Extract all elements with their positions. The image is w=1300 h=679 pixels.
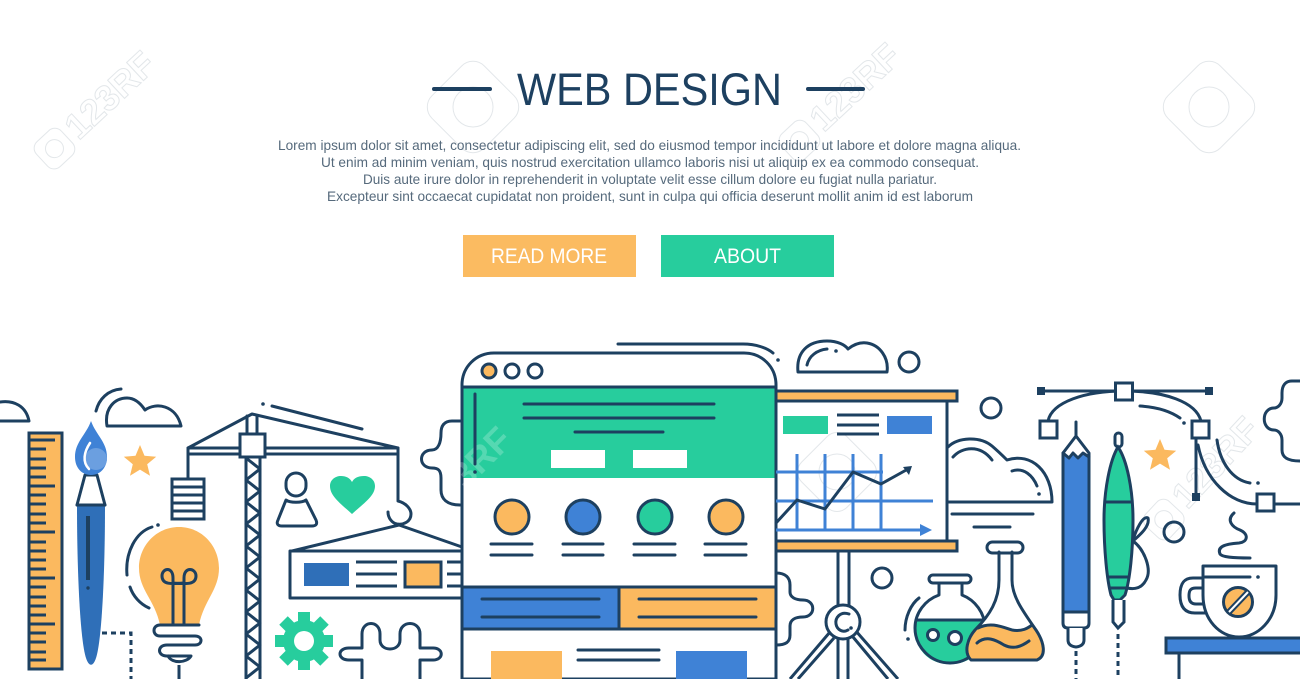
puzzle piece right of browser bbox=[776, 573, 813, 645]
button: read more bbox=[463, 235, 636, 277]
browser window bbox=[443, 353, 776, 679]
icon: round flask bbox=[905, 575, 985, 664]
icon: coffee cup with steam bbox=[1180, 513, 1276, 637]
button: read more: READ MORE bbox=[491, 245, 607, 268]
button: about: ABOUT bbox=[714, 245, 781, 268]
icon: erlenmeyer flask bbox=[967, 542, 1043, 660]
watermarks: 123RF bbox=[1163, 409, 1267, 516]
icon: star right bbox=[1144, 439, 1176, 470]
bezier curve tool bbox=[1037, 383, 1300, 511]
browser window: 3RF bbox=[443, 419, 520, 496]
icon: star left bbox=[124, 445, 156, 476]
intro paragraph bbox=[278, 137, 1021, 204]
puzzle piece bottom bbox=[340, 624, 441, 679]
table bbox=[1166, 638, 1300, 679]
watermarks: 123RF bbox=[801, 35, 908, 139]
decorative circles bbox=[872, 352, 1184, 588]
cloud: far left bbox=[0, 402, 29, 421]
wireframe panel under crane bbox=[290, 525, 462, 598]
cloud: top centre bbox=[798, 341, 887, 372]
icon: ruler bbox=[29, 433, 62, 669]
dashed connector bbox=[102, 633, 131, 679]
icon: pen tool bbox=[1104, 433, 1148, 679]
icon: paint brush bbox=[75, 421, 107, 665]
icon: construction crane bbox=[172, 402, 411, 679]
watermarks bbox=[27, 35, 1267, 545]
intro paragraph: Duis aute irure dolor in reprehenderit in voluptate velit esse cillum dolore eu fugiat nulla pariatur. bbox=[363, 171, 937, 187]
watermarks: 123RF bbox=[56, 43, 163, 147]
cloud: above brush bbox=[96, 389, 181, 426]
cloud: right of board bbox=[948, 439, 1052, 527]
icon: user bbox=[277, 473, 317, 526]
intro paragraph: Lorem ipsum dolor sit amet, consectetur adipiscing elit, sed do eiusmod tempor incididunt ut labore et dolore magna aliqua. bbox=[278, 137, 1021, 153]
icon: pencil bbox=[1063, 422, 1089, 679]
line above browser bbox=[618, 344, 780, 362]
icon: gear bbox=[275, 612, 333, 670]
intro paragraph: Excepteur sint occaecat cupidatat non proident, sunt in culpa qui officia deserunt mollit anim id est laborum bbox=[327, 188, 973, 204]
presentation board with chart bbox=[776, 391, 957, 551]
icon: heart bbox=[330, 476, 375, 514]
title: WEB DESIGN bbox=[517, 64, 782, 115]
icon: light bulb bbox=[127, 523, 219, 679]
puzzle piece left of browser bbox=[422, 421, 460, 505]
intro paragraph: Ut enim ad minim veniam, quis nostrud exercitation ullamco laboris nisi ut aliquip ex ea commodo consequat. bbox=[321, 154, 979, 170]
tripod stand bbox=[790, 551, 898, 679]
puzzle piece far right bbox=[1264, 381, 1300, 461]
button: about bbox=[661, 235, 834, 277]
